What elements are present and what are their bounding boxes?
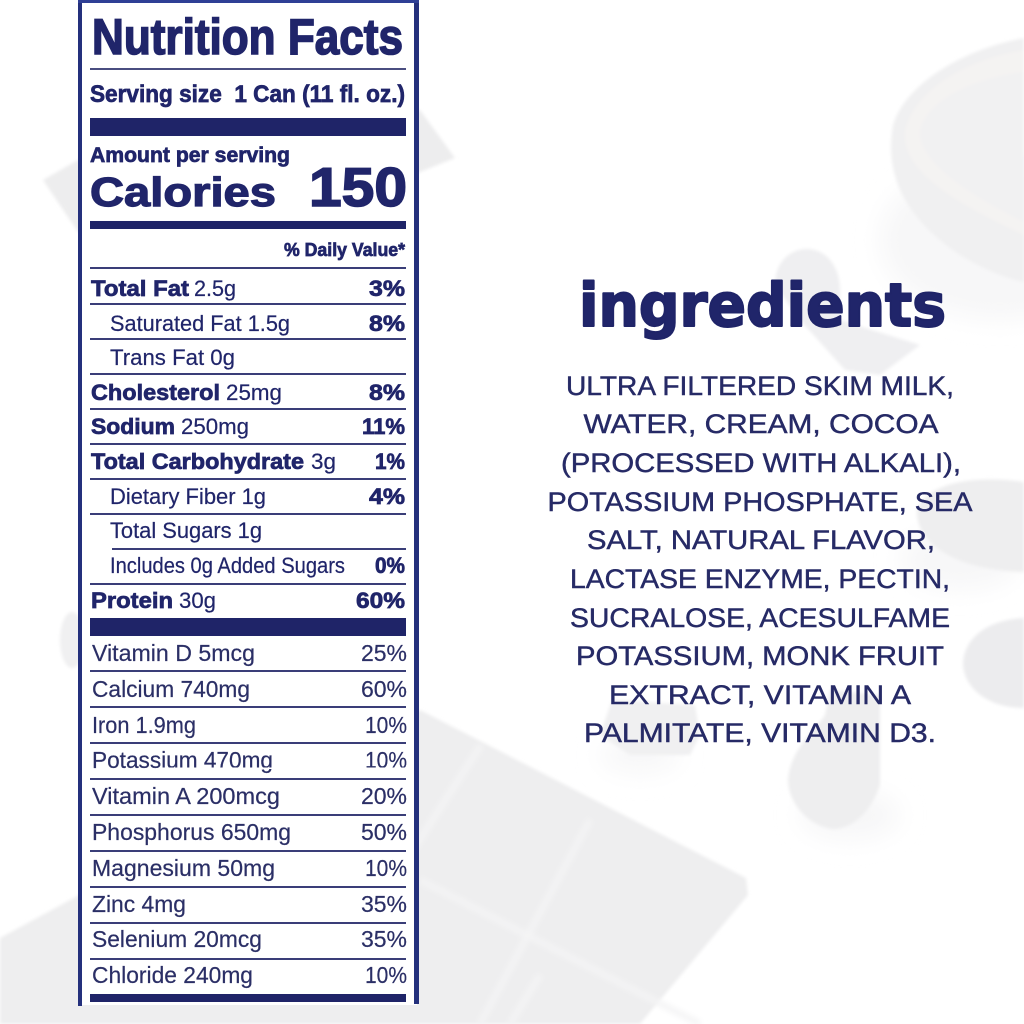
macronutrient rows: 25mg (226, 380, 282, 405)
vitamins and minerals rows: Potassium 470mg (92, 747, 273, 773)
ingredients list: SUCRALOSE, ACESULFAME (570, 603, 950, 633)
vitamins and minerals rows: Calcium 740mg (92, 676, 250, 702)
calories: Calories (90, 169, 276, 215)
vitamins and minerals rows: 35% (361, 926, 407, 952)
macronutrient rows: Trans Fat 0g (110, 345, 235, 370)
macronutrient rows: Total Carbohydrate (91, 449, 304, 474)
macronutrient rows: 250mg (181, 414, 249, 439)
calories value: 150 (309, 156, 407, 218)
macronutrient rows: 8% (369, 311, 405, 336)
vitamins and minerals rows: Chloride 240mg (92, 962, 253, 988)
macronutrient rows: 4% (369, 484, 405, 509)
macronutrient rows: Total Fat (91, 276, 190, 301)
macronutrient rows (91, 276, 405, 613)
ingredients list: POTASSIUM PHOSPHATE, SEA (548, 487, 972, 517)
serving size: Serving size 1 Can (11 fl. oz.) (90, 81, 405, 108)
macronutrient rows: Sodium (91, 414, 175, 439)
vitamins and minerals rows: 10% (365, 962, 407, 988)
macronutrient rows: Dietary Fiber 1g (110, 484, 266, 509)
ingredients list: SALT, NATURAL FLAVOR, (587, 525, 935, 555)
macronutrient rows: 30g (179, 588, 216, 613)
macronutrient rows: 60% (356, 588, 405, 613)
vitamins and minerals rows: 20% (361, 783, 407, 809)
ingredients list: LACTASE ENZYME, PECTIN, (570, 564, 950, 594)
vitamins and minerals rows: 10% (365, 712, 407, 738)
macronutrient rows: 3% (369, 276, 405, 301)
vitamins and minerals rows: 25% (361, 640, 407, 666)
macronutrient rows: Protein (91, 588, 173, 613)
daily value header: % Daily Value* (284, 240, 405, 260)
vitamins and minerals rows: 10% (365, 747, 407, 773)
macronutrient rows: Cholesterol (91, 380, 220, 405)
vitamins and minerals rows: Zinc 4mg (92, 891, 186, 917)
ingredients list: PALMITATE, VITAMIN D3. (584, 718, 936, 748)
rules (90, 267, 406, 960)
ingredients list: WATER, CREAM, COCOA (584, 409, 938, 439)
ingredients heading: ingredients (579, 271, 946, 341)
macronutrient rows: 1% (375, 449, 405, 474)
macronutrient rows: 8% (369, 380, 405, 405)
macronutrient rows: 3g (311, 449, 336, 474)
vitamins and minerals rows: 60% (361, 676, 407, 702)
vitamins and minerals rows: Selenium 20mcg (92, 926, 262, 952)
macronutrient rows: 11% (362, 414, 405, 439)
vitamins and minerals rows: 10% (365, 855, 407, 881)
vitamins and minerals rows: Magnesium 50mg (92, 855, 275, 881)
vitamins and minerals rows: Iron 1.9mg (92, 712, 196, 738)
vitamins and minerals rows: 35% (361, 891, 407, 917)
ingredients list: ULTRA FILTERED SKIM MILK, (566, 371, 954, 401)
amount per serving: Amount per serving (90, 144, 290, 167)
ingredients list: (PROCESSED WITH ALKALI), (561, 448, 961, 478)
macronutrient rows: Total Sugars 1g (110, 518, 262, 543)
title: Nutrition Facts (92, 9, 403, 65)
macronutrient rows: 0% (375, 553, 405, 578)
vitamins and minerals rows (92, 640, 407, 988)
macronutrient rows: Includes 0g Added Sugars (110, 553, 345, 578)
vitamins and minerals rows: Vitamin A 200mcg (92, 783, 280, 809)
vitamins and minerals rows: Phosphorus 650mg (92, 819, 291, 845)
macronutrient rows: 2.5g (194, 276, 236, 301)
ingredients list (548, 371, 972, 748)
macronutrient rows: Saturated Fat 1.5g (110, 311, 290, 336)
ingredients list: POTASSIUM, MONK FRUIT (576, 641, 944, 671)
nutrition facts panel (78, 0, 419, 1006)
vitamins and minerals rows: 50% (361, 819, 407, 845)
ingredients list: EXTRACT, VITAMIN A (609, 680, 911, 710)
vitamins and minerals rows: Vitamin D 5mcg (92, 640, 255, 666)
